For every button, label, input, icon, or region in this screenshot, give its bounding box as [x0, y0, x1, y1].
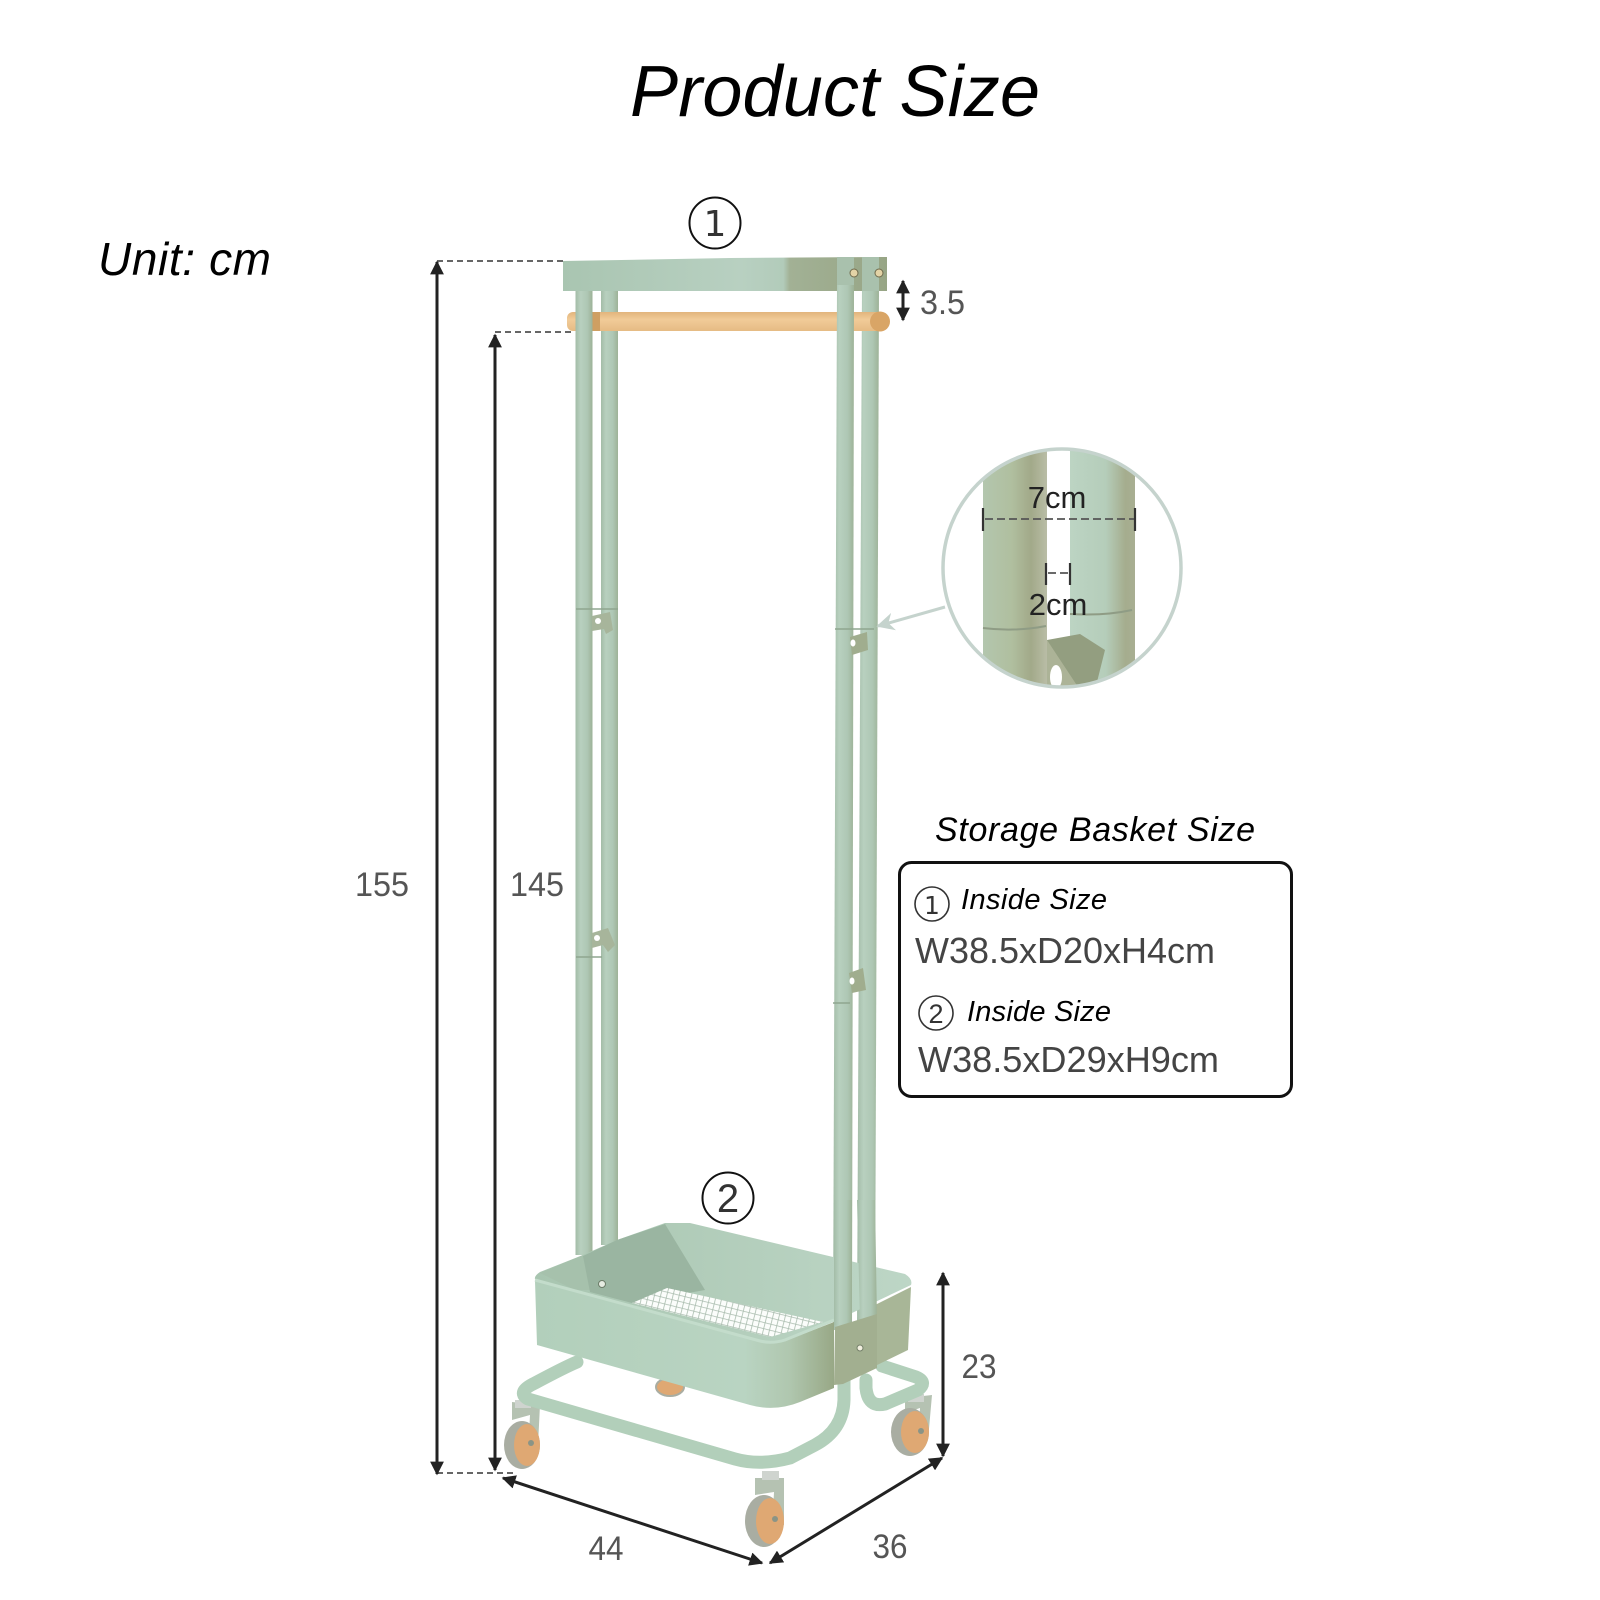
detail lens: pole spacing — [943, 440, 1181, 700]
basket side panel — [875, 1287, 911, 1366]
inside size 1: W38.5xD20xH4cm — [915, 930, 1215, 971]
wheel left — [504, 1400, 540, 1469]
dimension: 44 width — [503, 1478, 762, 1568]
storage basket size heading: Storage Basket Size — [935, 811, 1255, 849]
front poles — [576, 285, 854, 1330]
top tray — [563, 257, 887, 291]
marker 2 — [702, 1172, 754, 1224]
inside size 1 — [915, 884, 1215, 971]
base tubes — [523, 1362, 923, 1462]
dimension: 23 basket height: 23 — [962, 1348, 996, 1386]
infographic canvas — [101, 64, 1293, 1566]
clothes rack frame — [563, 257, 890, 1330]
basket rim — [535, 1280, 834, 1342]
inside size 2: 2 — [928, 999, 944, 1029]
inside size 1: 1 — [924, 891, 940, 920]
wire mesh floor — [632, 1288, 823, 1337]
dimension: 3.5 rod offset: 3.5 — [920, 284, 965, 322]
dimension: 3.5 rod offset — [903, 281, 965, 322]
wheel right — [891, 1394, 932, 1456]
caster wheels — [504, 1378, 932, 1547]
marker 2: 2 — [717, 1177, 739, 1221]
storage basket — [535, 1200, 911, 1408]
bracket screw — [857, 1345, 863, 1351]
inside size 2: Inside Size — [967, 996, 1111, 1028]
wheel center — [745, 1471, 784, 1547]
pointer arrow to detail view — [878, 607, 945, 626]
dimension: 155 height — [355, 261, 565, 1474]
basket interior — [535, 1223, 911, 1345]
marker 1: 1 — [704, 204, 726, 245]
detail lens: pole spacing: 2cm — [1029, 587, 1087, 622]
dimension: 145 height: 145 — [510, 866, 564, 904]
inside size 2 — [918, 996, 1219, 1080]
pole joints and brackets — [576, 609, 874, 1003]
detail lens: pole spacing: 7cm — [1028, 480, 1086, 515]
wheel hidden under basket — [656, 1378, 684, 1396]
corner bracket — [834, 1314, 877, 1385]
back poles — [601, 285, 879, 1327]
basket front face — [535, 1281, 834, 1408]
dimension: 36 depth: 36 — [872, 1528, 908, 1566]
inside size 2: W38.5xD29xH9cm — [918, 1039, 1219, 1080]
title: Product Size — [630, 52, 1040, 132]
unit label: Unit: cm — [98, 233, 271, 285]
dimension: 44 width: 44 — [588, 1530, 624, 1568]
wooden hanging rod — [567, 312, 890, 332]
right poles in front of basket — [834, 1200, 877, 1325]
marker 1 — [690, 198, 740, 248]
inside size 1: Inside Size — [961, 884, 1107, 916]
storage basket size panel — [900, 862, 1292, 1096]
dimension: 155 height: 155 — [355, 866, 409, 904]
dimension: 36 depth — [770, 1458, 942, 1566]
